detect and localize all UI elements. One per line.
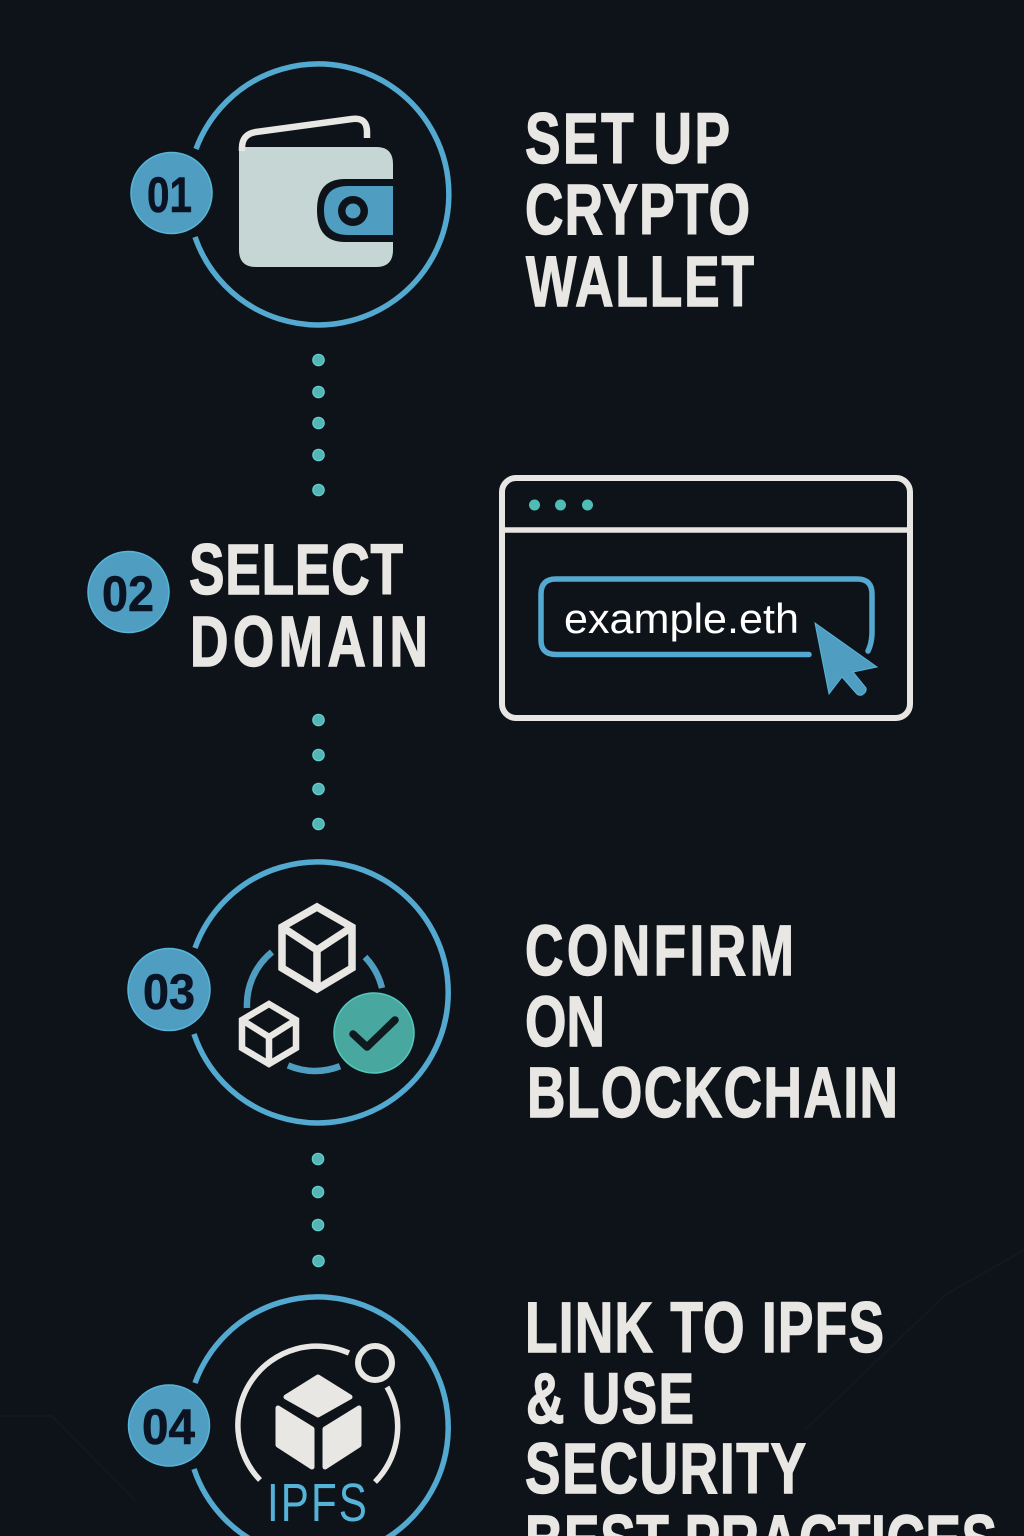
- domain text: example.eth: [564, 595, 799, 642]
- heading: [525, 912, 898, 1133]
- IPFS label: IPFS: [267, 1473, 367, 1533]
- icon: cursor: [815, 623, 877, 695]
- heading: DOMAIN: [190, 603, 428, 682]
- heading: ON: [525, 983, 605, 1062]
- heading: SELECT: [189, 531, 403, 610]
- connector dots 3: [312, 1153, 324, 1267]
- icon: blockchain cubes: [242, 907, 414, 1073]
- ring with badge gap: [194, 1297, 448, 1536]
- heading: [525, 1289, 997, 1536]
- heading: CONFIRM: [525, 912, 794, 991]
- step 2: select domain: [88, 478, 910, 718]
- badge 03: [128, 948, 210, 1030]
- heading: CRYPTO: [525, 171, 750, 250]
- large cube: [282, 907, 352, 989]
- badge 04: 04: [142, 1399, 195, 1455]
- orbit arcs: [238, 1346, 398, 1482]
- heading: SET UP: [525, 100, 730, 179]
- heading: SECURITY: [525, 1430, 806, 1509]
- step 4: link to IPFS and use security best practices: [128, 1289, 997, 1536]
- badge 01: [131, 152, 212, 234]
- heading: [189, 531, 428, 682]
- heading: & USE: [526, 1360, 694, 1439]
- connector dots 2: [313, 714, 324, 830]
- window control dots: [529, 500, 593, 510]
- icon: IPFS cube: [238, 1346, 398, 1533]
- ring with badge gap: [194, 862, 448, 1123]
- step 3: confirm on blockchain: [128, 862, 898, 1133]
- heading: LINK TO IPFS: [525, 1289, 884, 1368]
- badge 04: [128, 1385, 210, 1466]
- connector dots 1: [313, 354, 324, 496]
- address input: [541, 579, 872, 654]
- badge 02: 02: [102, 566, 154, 622]
- badge 01: 01: [147, 167, 192, 223]
- heading: [525, 100, 754, 322]
- heading: WALLET: [526, 243, 754, 322]
- icon: wallet: [239, 119, 393, 267]
- orbit node: [358, 1346, 392, 1380]
- browser window: [502, 478, 910, 718]
- orbit arcs: [247, 952, 382, 1071]
- small cube: [242, 1004, 296, 1064]
- step 1: set up crypto wallet: [131, 64, 754, 325]
- ring with badge gap: [195, 64, 449, 325]
- badge 02: [88, 552, 169, 632]
- solid cube faces: [278, 1377, 359, 1467]
- heading: BLOCKCHAIN: [527, 1054, 898, 1133]
- check badge: [334, 993, 414, 1073]
- badge 03: 03: [143, 964, 195, 1020]
